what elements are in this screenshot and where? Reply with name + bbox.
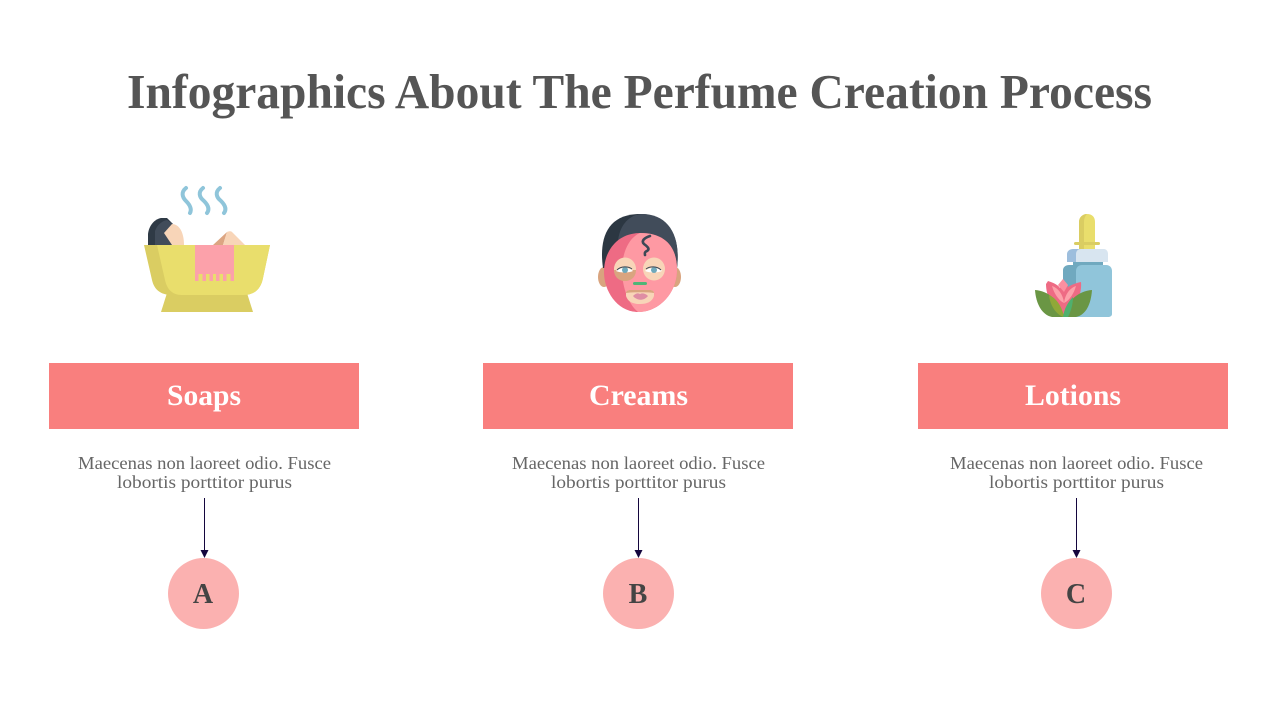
bather knee — [213, 231, 245, 245]
text block: Soaps: Maecenas non laoreet odio. Fusce — [78, 453, 331, 473]
mouth area — [626, 290, 654, 304]
dropper — [1079, 214, 1095, 250]
mask — [604, 233, 677, 312]
panel: Soaps header: Soaps — [167, 379, 241, 412]
cap — [1067, 249, 1087, 262]
title: Infographics About The Perfume Creation Process — [127, 64, 1152, 119]
badge: A: A — [193, 579, 214, 610]
tub stand — [161, 293, 253, 312]
arrow: Creams to B — [634, 498, 642, 558]
ears — [598, 267, 610, 287]
forehead wrinkle — [643, 236, 650, 255]
panel: Creams header — [483, 363, 793, 429]
panel: Lotions header — [918, 363, 1228, 429]
icon: face mask — [598, 214, 681, 312]
text block: Lotions: lobortis porttitor purus — [989, 472, 1164, 492]
badge: C — [1041, 558, 1112, 629]
text block: Creams: lobortis porttitor purus — [551, 472, 726, 492]
text block: Lotions: Maecenas non laoreet odio. Fusce — [950, 453, 1203, 473]
eyes — [616, 268, 633, 272]
arrow: Soaps to A — [200, 498, 208, 558]
icon: bath tub — [144, 188, 270, 312]
text block: Soaps: lobortis porttitor purus — [117, 472, 292, 492]
badge: B — [603, 558, 674, 629]
badge: C: C — [1066, 579, 1086, 610]
towel — [195, 245, 234, 281]
text block: Creams: Maecenas non laoreet odio. Fusce — [512, 453, 765, 473]
panel: Lotions header: Lotions — [1025, 379, 1121, 412]
tub body — [144, 245, 270, 295]
lotus petals — [1046, 279, 1081, 315]
hair — [602, 214, 678, 268]
nose strip — [633, 282, 647, 285]
bather head — [148, 218, 184, 245]
panel: Soaps header — [49, 363, 359, 429]
badge: B: B — [629, 579, 647, 610]
text block: Lotions — [950, 453, 1203, 492]
text block: Soaps — [78, 453, 331, 492]
icon: dropper bottle with lotus — [1035, 214, 1112, 317]
panel: Creams header: Creams — [589, 379, 688, 412]
eye patches — [614, 258, 636, 280]
steam — [183, 188, 225, 213]
badge: A — [168, 558, 239, 629]
lotus leaves — [1035, 290, 1063, 317]
bottle — [1063, 265, 1085, 317]
arrow: Lotions to C — [1072, 498, 1080, 558]
text block: Creams — [512, 453, 765, 492]
